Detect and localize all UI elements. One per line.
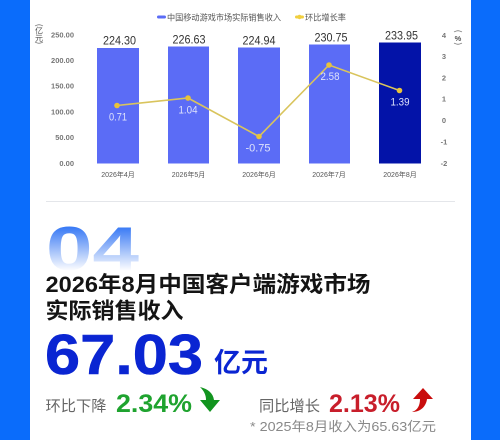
headline revenue figure: 67.03 [45, 323, 203, 387]
chart: mobile game market revenue [35, 12, 462, 179]
growth rate labels: 0.71 [109, 112, 127, 124]
growth rate labels [109, 71, 410, 154]
month-on-month change: 环比下降 [46, 398, 106, 415]
right axis unit: % [455, 34, 462, 43]
headline revenue figure [45, 323, 268, 387]
month-on-month change: 2.34% [116, 390, 192, 418]
headline revenue figure: 亿元 [214, 348, 268, 378]
bar value labels: 230.75 [314, 30, 348, 44]
left axis labels: 50.00 [55, 133, 74, 142]
growth rate labels: 1.04 [178, 104, 198, 116]
month labels: 2026年6月 [242, 170, 276, 179]
month labels: 2026年8月 [383, 170, 417, 179]
right axis labels: 1 [442, 94, 446, 104]
icon: green down arrow [200, 387, 220, 412]
bar value labels: 224.30 [103, 34, 136, 48]
chart legend [157, 12, 346, 22]
right axis labels: 0 [442, 116, 446, 125]
right blue side band [471, 0, 500, 440]
bars [97, 42, 421, 164]
month labels: 2026年7月 [312, 170, 346, 179]
right axis labels: 2 [442, 74, 446, 82]
year-on-year change: 同比增长 [259, 398, 320, 415]
growth rate line [114, 62, 402, 139]
bar value labels: 233.95 [385, 28, 418, 42]
icon: red up arrow [412, 388, 433, 412]
month-on-month change [46, 387, 220, 418]
right axis labels: -1 [441, 138, 447, 146]
right axis labels: 3 [442, 52, 446, 61]
month labels: 2026年4月 [101, 170, 135, 179]
left axis labels: 200.00 [51, 56, 74, 65]
section title: 实际销售收入 [46, 298, 184, 324]
bar value labels [103, 28, 418, 48]
month labels [101, 170, 417, 179]
year-on-year change: 2.13% [329, 390, 400, 418]
section divider [46, 201, 455, 202]
left axis labels [51, 30, 74, 168]
left axis labels: 0.00 [59, 159, 74, 168]
chart legend: 环比增长率 [305, 12, 346, 22]
chart legend: 中国移动游戏市场实际销售收入 [167, 12, 281, 22]
left axis labels: 100.00 [51, 108, 74, 116]
growth rate labels: 2.58 [320, 71, 340, 83]
month labels: 2026年5月 [172, 170, 205, 179]
section title: 2026年8月中国客户端游戏市场 [46, 272, 370, 297]
right axis labels: 4 [442, 31, 447, 40]
right axis unit [454, 31, 462, 44]
left axis unit: 元 [35, 34, 43, 43]
left blue side band [0, 0, 30, 440]
left axis unit: 亿 [35, 26, 43, 36]
section title [46, 272, 370, 324]
left axis labels: 250.00 [51, 30, 74, 40]
footnote: * 2025年8月收入为65.63亿元 [250, 419, 436, 434]
growth rate labels: 1.39 [390, 96, 410, 108]
right axis labels [441, 31, 447, 168]
left axis unit [35, 25, 43, 43]
right axis labels: -2 [441, 159, 447, 168]
year-on-year change [259, 388, 433, 418]
left axis labels: 150.00 [51, 82, 74, 90]
growth rate labels: -0.75 [246, 142, 270, 154]
bar value labels: 224.94 [242, 34, 276, 48]
section number 04: 04 [46, 215, 140, 284]
bar value labels: 226.63 [172, 32, 206, 46]
